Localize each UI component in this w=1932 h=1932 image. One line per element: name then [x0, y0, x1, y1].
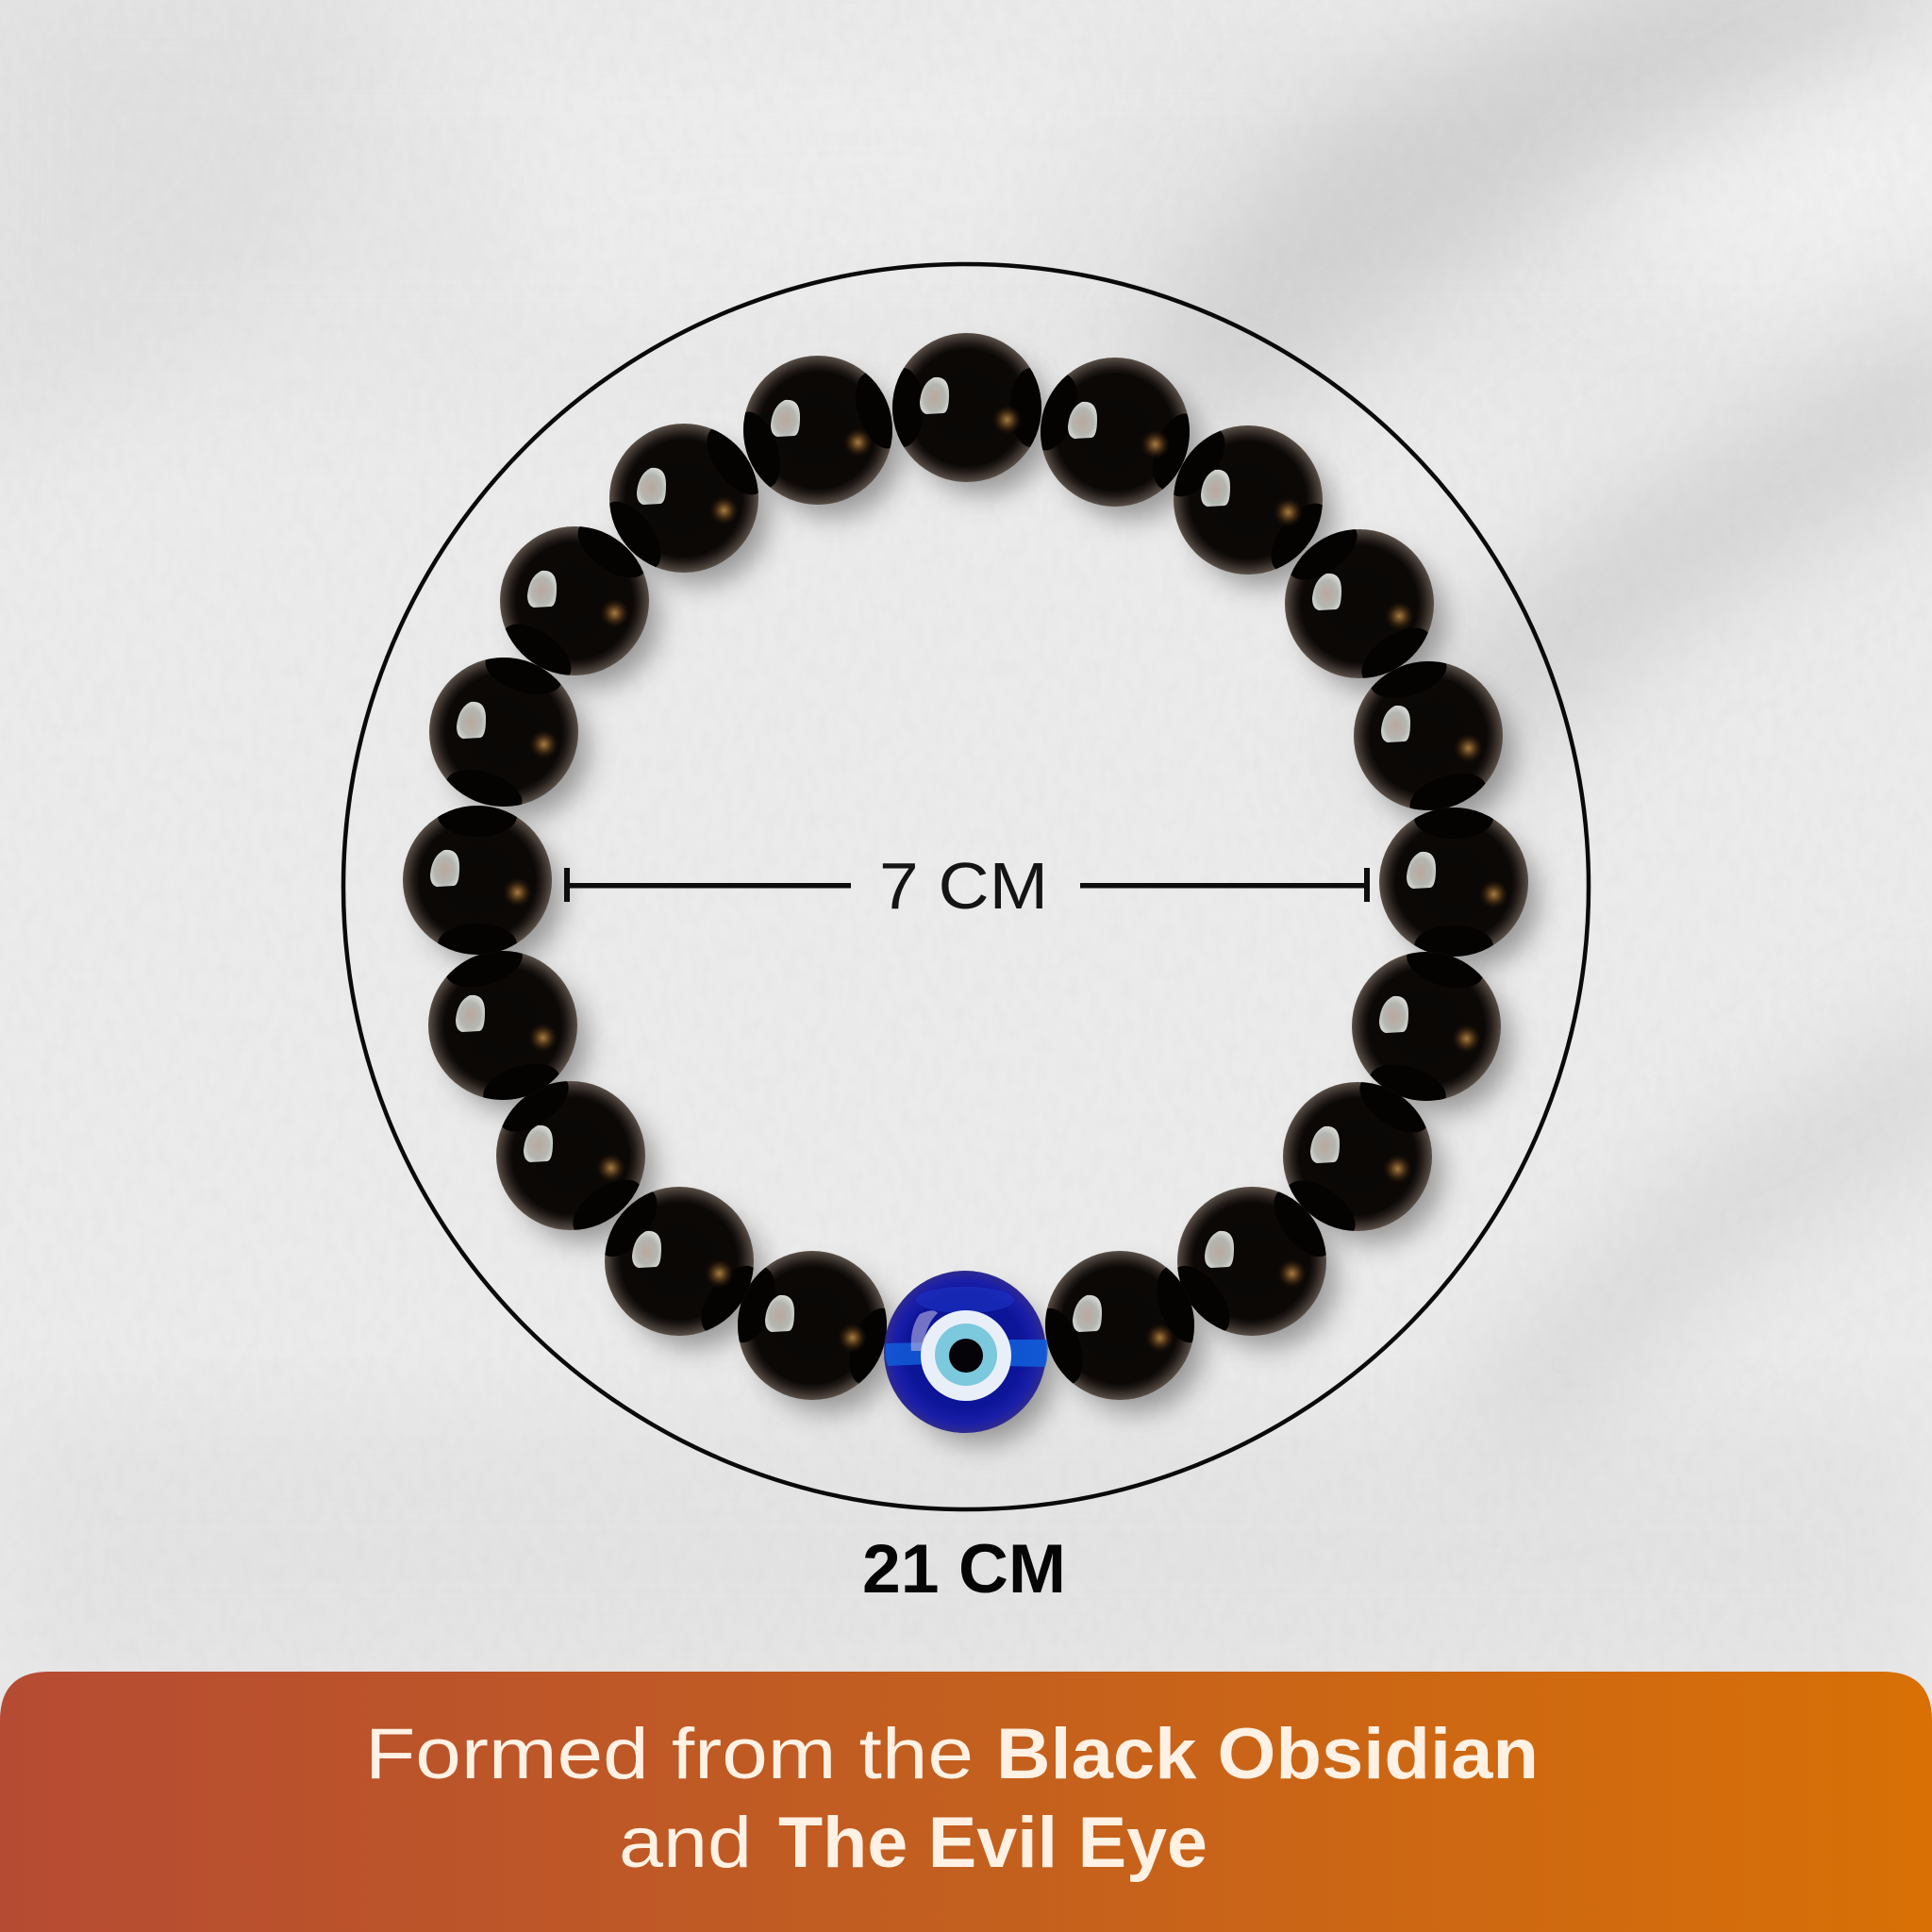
dimension line: right	[1080, 868, 1370, 902]
inner diameter measurement	[564, 849, 1370, 923]
dimension line: left	[564, 868, 851, 902]
banner text	[365, 1714, 1539, 1883]
banner text: The Evil Eye	[778, 1803, 1208, 1883]
circumference ring	[343, 264, 1589, 1509]
obsidian beads	[403, 333, 1528, 1400]
banner text: and	[619, 1803, 752, 1883]
banner text: Formed from the	[365, 1714, 974, 1794]
banner text: Black Obsidian	[996, 1714, 1539, 1794]
bracelet	[403, 333, 1528, 1433]
label: 7 CM: 7 CM	[879, 849, 1048, 923]
banner	[0, 1672, 1932, 1932]
evil eye bead	[884, 1271, 1048, 1433]
bracelet shadow	[423, 355, 1539, 1444]
banner background	[0, 1672, 1932, 1932]
circumference label: 21 CM: 21 CM	[862, 1531, 1066, 1607]
